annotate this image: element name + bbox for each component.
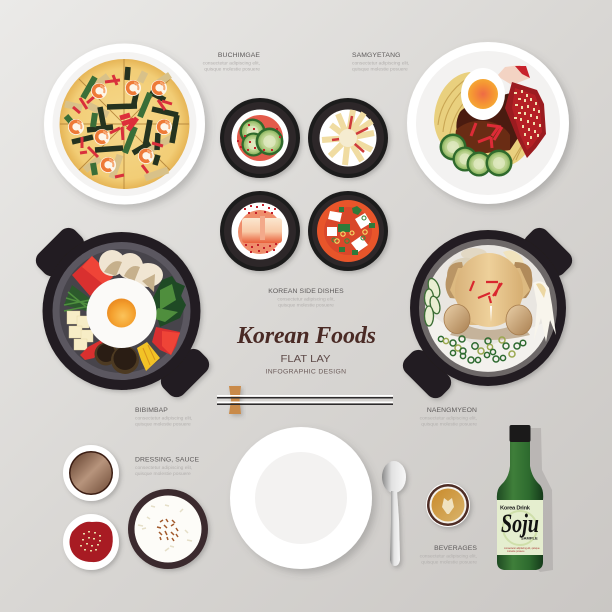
label: samgyetang: SAMGYETANG [352, 52, 400, 59]
label: buchimgae: consectetur adipiscing elit, [203, 60, 260, 66]
title: korean foods [236, 323, 376, 376]
soju bottle: molestie posuere [507, 550, 525, 553]
label: samgyetang: consectetur adipiscing elit, [352, 60, 409, 66]
title: korean foods: Korean Foods [236, 323, 376, 349]
label: samgyetang: quisque molestie posuere [352, 66, 408, 72]
hot pot: samgyetang chicken [399, 224, 576, 402]
label: beverages: quisque molestie posuere [421, 560, 477, 566]
bowl: cucumber side dish [220, 98, 300, 178]
bowl: kimchi side dish [220, 191, 300, 271]
bowl: radish side dish [308, 98, 388, 178]
label: beverages [420, 545, 477, 566]
title: korean foods: FLAT LAY [280, 353, 330, 365]
label: samgyetang [352, 52, 409, 72]
label: naengmyeon: consectetur adipiscing elit, [420, 416, 477, 422]
title: korean foods: INFOGRAPHIC DESIGN [266, 368, 346, 376]
label: korean side dishes: KOREAN SIDE DISHES [268, 288, 344, 295]
label: buchimgae [203, 52, 260, 72]
label: naengmyeon: NAENGMYEON [427, 407, 477, 414]
label: naengmyeon [420, 407, 477, 428]
bowl: tofu stew [308, 191, 388, 271]
plate: buchimgae pancake [44, 44, 205, 204]
bowl: white rice [128, 489, 208, 569]
label: bibimbap: consectetur adipiscing elit, [135, 416, 192, 422]
dish: red sauce [63, 514, 119, 570]
soju bottle: Soju [501, 509, 539, 538]
soju bottle: SAMPLE [521, 536, 538, 540]
label: buchimgae: quisque molestie posuere [204, 66, 260, 72]
soju bottle: consectetur adipiscing elit, quisque [504, 547, 540, 550]
hot pot: bibimbap [32, 224, 213, 401]
cup: beverage [426, 483, 470, 527]
label: beverages: BEVERAGES [434, 545, 477, 552]
dish: soy dressing [63, 445, 119, 501]
label: korean side dishes: consectetur adipiscing elit, [277, 296, 335, 302]
label: dressing and sauce: quisque molestie posuere [135, 471, 191, 477]
soju bottle: Korea Drink [500, 506, 531, 512]
label: dressing and sauce: DRESSING, SAUCE [135, 456, 200, 464]
empty dinner plate [230, 427, 372, 569]
label: beverages: consectetur adipiscing elit, [420, 554, 477, 560]
label: naengmyeon: quisque molestie posuere [421, 422, 477, 428]
label: dressing and sauce [135, 456, 200, 477]
label: bibimbap [135, 407, 192, 428]
spoon [382, 461, 406, 566]
plate: cold noodles with egg [407, 42, 569, 204]
label: buchimgae: BUCHIMGAE [218, 52, 260, 59]
label: korean side dishes [268, 288, 344, 308]
label: dressing and sauce: consectetur adipiscing elit, [135, 465, 192, 471]
soju bottle [497, 425, 553, 572]
chopsticks [217, 386, 393, 414]
label: bibimbap: BIBIMBAP [135, 407, 168, 414]
label: bibimbap: quisque molestie posuere [135, 422, 191, 428]
label: korean side dishes: quisque molestie posuere [278, 302, 334, 308]
